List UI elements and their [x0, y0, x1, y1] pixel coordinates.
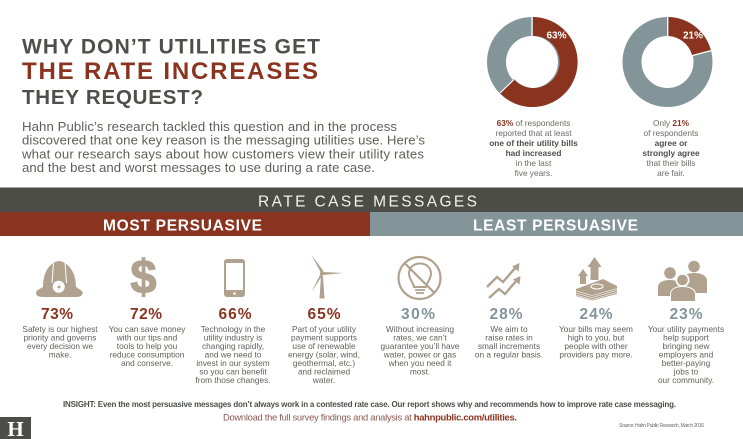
heading: most persuasive: MOST PERSUASIVE: [103, 218, 262, 234]
intro text: what our research says about how customers view their utility rates: [21, 146, 424, 162]
heading: least persuasive: [370, 212, 743, 236]
donut caption: 21%: Only 21%: [653, 118, 690, 128]
message: employers and jobs: employers and: [659, 350, 714, 360]
panel: most persuasive: [22, 250, 360, 385]
message: without increasing rates: Without increasing: [386, 324, 455, 334]
donut caption: 21%: [642, 118, 700, 178]
donut caption: 63%: 63% of respondents: [497, 118, 570, 128]
message: without increasing rates: most.: [410, 366, 430, 376]
stat: 28%: 28%: [490, 306, 523, 323]
message: small increments: [475, 324, 543, 360]
stat: 23%: 23%: [670, 306, 703, 323]
message: renewable energy: payment supports: [291, 332, 357, 342]
stat: 24%: 24%: [580, 306, 613, 323]
donut caption: 63%: in the last: [516, 158, 552, 168]
insight text: INSIGHT: Even the most persuasive messages don’t always work in a contested rate case. Our report shows why and recommends how to improve rate case messaging.: [63, 400, 676, 409]
donut chart: 63%: 63%: [546, 30, 567, 42]
stat: 66%: 66%: [218, 306, 252, 323]
message: technology: Technology in the: [201, 324, 266, 334]
message: technology: [195, 324, 271, 385]
message: save money: tools to help you: [117, 341, 178, 351]
download link text: Download the full survey findings and analysis at hahnpublic.com/utilities.: [223, 412, 517, 422]
donut chart: 63%: [496, 17, 578, 107]
donut caption: 21%: agree or: [655, 138, 688, 148]
heading: least persuasive: LEAST PERSUASIVE: [473, 218, 638, 234]
message: employers and jobs: help support: [663, 332, 710, 342]
message: renewable energy: water.: [312, 375, 335, 385]
message: other providers: providers pay more.: [559, 350, 633, 360]
message: save money: [109, 324, 186, 368]
message: small increments: small increments: [478, 341, 540, 351]
donut caption: 63%: reported that at least: [495, 128, 572, 138]
donut caption: 63%: had increased: [506, 148, 561, 158]
donut caption: 21%: are fair.: [657, 168, 685, 178]
donut caption: 63%: one of their utility bills: [489, 138, 578, 148]
donut caption: 21%: strongly agree: [642, 148, 700, 158]
intro text: discovered that one key reason is the messaging utilities use. Here’s: [22, 132, 425, 148]
message: employers and jobs: jobs to: [673, 366, 699, 376]
message: small increments: We aim to: [490, 324, 528, 334]
icon: wind turbine: [312, 255, 344, 298]
message: other providers: Your bills may seem: [559, 324, 633, 334]
message: renewable energy: [288, 324, 360, 385]
message: technology: so you can benefit: [199, 366, 267, 376]
title: [22, 36, 320, 109]
stat: 72%: 72%: [130, 306, 162, 323]
intro text: [21, 119, 425, 175]
icon: smartphone: [224, 259, 245, 297]
message: save money: reduce consumption: [110, 350, 185, 360]
source note: Source: Hahn Public Research, March 2016: [619, 423, 704, 429]
donut chart: 21%: [632, 17, 712, 98]
icon: hard hat: [36, 261, 83, 297]
message: renewable energy: Part of your utility: [292, 324, 357, 334]
message: renewable energy: energy (solar, wind,: [288, 350, 360, 360]
message: employers and jobs: better-paying: [662, 358, 711, 368]
donut chart: 21%: 21%: [683, 30, 703, 42]
message: small increments: on a regular basis.: [475, 350, 543, 360]
banner: rate case messages: [0, 188, 743, 212]
message: technology: changing rapidly,: [202, 341, 264, 351]
message: safety: make.: [49, 350, 71, 360]
donut caption: 21%: of respondents: [644, 128, 698, 138]
message: save money: with our tips and: [116, 332, 178, 342]
donut caption: 63%: five years.: [515, 168, 552, 178]
message: safety: every decision we: [27, 341, 93, 351]
icon: group of people: [658, 261, 707, 302]
title: THE RATE INCREASES: [22, 58, 318, 85]
message: safety: Safety is our highest: [22, 324, 98, 334]
title: WHY DON’T UTILITIES GET: [22, 36, 320, 58]
message: other providers: high to you, but: [568, 332, 625, 342]
intro text: and the best and worst messages to use during a rate case.: [22, 160, 375, 175]
message: without increasing rates: guarantee you’ll have: [381, 341, 460, 351]
message: safety: priority and governs: [24, 332, 96, 342]
banner: rate case messages: RATE CASE MESSAGES: [258, 194, 477, 210]
message: renewable energy: and reclaimed: [298, 366, 350, 376]
message: technology: and we need to: [205, 350, 262, 360]
message: employers and jobs: Your utility payments: [648, 324, 724, 334]
message: employers and jobs: our community.: [658, 375, 714, 385]
message: employers and jobs: [648, 324, 724, 385]
icon: money with arrows: [576, 257, 617, 300]
message: without increasing rates: rates, we can’t: [393, 332, 447, 342]
stat: 73%: 73%: [41, 306, 73, 323]
donut caption: 63%: [489, 118, 578, 178]
message: technology: invest in our system: [196, 358, 270, 368]
message: other providers: [559, 324, 633, 360]
heading: most persuasive: [0, 212, 370, 236]
message: without increasing rates: [381, 324, 460, 376]
message: without increasing rates: when you need it: [388, 358, 452, 368]
message: employers and jobs: bringing new: [662, 341, 711, 351]
message: renewable energy: use of renewable: [292, 341, 356, 351]
message: technology: from those changes.: [195, 375, 271, 385]
title: THEY REQUEST?: [22, 86, 203, 109]
stat: 30%: 30%: [401, 306, 435, 323]
message: renewable energy: geothermal, etc.): [293, 358, 355, 368]
logo: Hahn H: [0, 417, 31, 439]
panel: least persuasive: [381, 257, 724, 385]
icon: crossed-out light bulb: [398, 257, 440, 299]
message: small increments: raise rates in: [485, 332, 533, 342]
message: without increasing rates: water, power or gas: [383, 350, 456, 360]
message: technology: utility industry is: [204, 332, 262, 342]
message: other providers: people with other: [564, 341, 628, 351]
intro text: Hahn Public’s research tackled this question and in the process: [22, 119, 397, 134]
donut caption: 21%: that their bills: [647, 158, 695, 168]
stat: 65%: 65%: [308, 306, 341, 323]
message: safety: [22, 324, 98, 360]
icon: dollar sign: $: [130, 250, 157, 303]
icon: rising trend arrows: [487, 263, 520, 298]
message: save money: You can save money: [109, 324, 186, 334]
message: save money: and conserve.: [121, 358, 173, 368]
